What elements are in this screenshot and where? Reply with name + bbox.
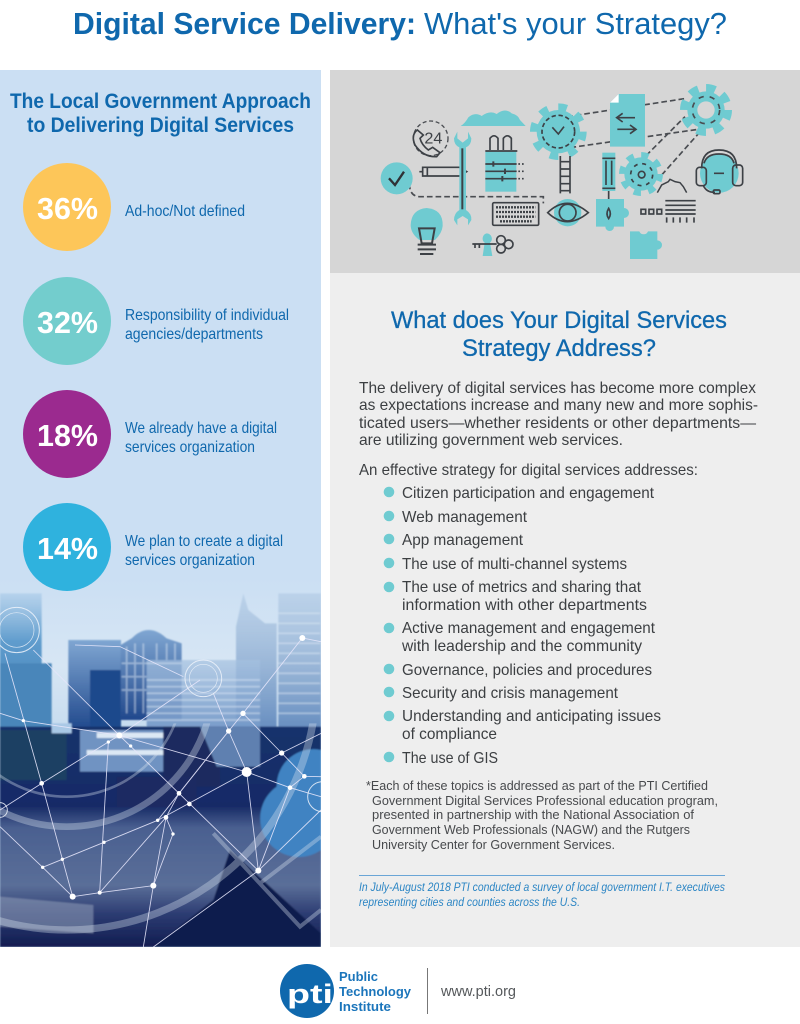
icon: large gear [684,88,728,132]
icon: screwdriver [602,153,615,208]
stat: 32%: 32% [37,305,98,340]
stat: 18%: services organization [125,439,255,456]
intro paragraph: ticated users—whether residents or other departments— [359,415,756,432]
panel heading [10,90,311,137]
section heading: What does Your Digital Services [391,307,727,334]
stat: 18% [23,390,277,478]
survey note: representing cities and counties across the U.S. [359,897,580,909]
stat: 36% [23,163,245,251]
icon: phone 24: 24 [424,130,443,147]
bullet list: Web management [402,509,528,526]
network lines [0,638,321,947]
icon: check [381,162,413,194]
panel: icon illustration [330,70,800,273]
survey note: In July-August 2018 PTI conducted a survey of local government I.T. executives [359,882,725,894]
stat: 32%: Responsibility of individual [125,307,289,324]
bullet list: The use of metrics and sharing that [402,579,642,596]
icon: small gear [622,155,660,193]
section heading [391,307,727,362]
footnote: *Each of these topics is addressed as part of the PTI Certified [366,779,708,793]
icon: key [472,233,513,256]
footer logo [280,964,516,1018]
icon: light bulb [411,208,443,254]
bullet list: Governance, policies and procedures [402,662,652,679]
icon: phone 24 [413,121,448,157]
stat: 14%: services organization [125,552,255,569]
footer logo: Public [339,969,378,984]
bullet list: Citizen participation and engagement [402,485,655,502]
footnote [366,779,718,852]
intro paragraph [359,380,758,479]
panel: local government approach [0,70,338,947]
bullet list: The use of multi-channel systems [402,556,627,573]
bullet list [384,485,661,767]
icon: headset [696,150,743,194]
footer logo: Technology [339,984,412,999]
intro paragraph: as expectations increase and many new and more sophis- [359,397,758,414]
panel: strategy text [330,273,800,947]
icon: ladder [560,156,570,193]
stat: 18%: 18% [37,418,98,453]
intro paragraph: are utilizing government web services. [359,432,623,449]
icon: dashed connectors [409,98,702,203]
bullet list: information with other departments [402,597,647,614]
stat: 36%: Ad-hoc/Not defined [125,203,245,220]
stat: 32% [23,277,289,365]
icon: outline gear and data lines [641,179,696,223]
city network image [0,593,321,947]
icon: pencil [419,167,467,176]
stat: 18%: We already have a digital [125,420,277,437]
section heading: Strategy Address? [462,335,656,362]
icon: wrench [454,132,471,225]
panel heading: The Local Government Approach [10,90,311,113]
bullet list: Active management and engagement [402,620,656,637]
icon: clock gear [534,107,583,156]
stat: 14%: We plan to create a digital [125,533,283,550]
bullet list: of compliance [402,726,497,743]
footnote: University Center for Government Services. [372,838,615,852]
icon: eye [548,199,588,226]
icon: keyboard [493,203,539,225]
survey note [359,882,725,909]
footnote: Government Web Professionals (NAGW) and the Rutgers [372,823,690,837]
bullet list: The use of GIS [402,750,498,767]
icon: sliders [485,136,525,192]
footer logo: pti [287,979,333,1009]
stat: 14% [23,503,283,591]
stat: 14%: 14% [37,531,98,566]
title: What's your Strategy? [424,6,727,41]
icon: cloud [461,110,526,126]
footnote: presented in partnership with the National Association of [372,808,695,822]
icon: puzzle and screwdriver tip [596,199,629,231]
intro paragraph: The delivery of digital services has become more complex [359,380,756,397]
stat: 32%: agencies/departments [125,326,263,343]
icon: puzzle piece [630,231,662,259]
intro paragraph: An effective strategy for digital services addresses: [359,462,698,479]
title [73,6,727,41]
bullet list: App management [402,532,524,549]
bullet list: with leadership and the community [401,638,642,655]
footnote: Government Digital Services Professional education program, [372,794,718,808]
footer logo: Institute [339,999,391,1014]
bullet list: Security and crisis management [402,685,619,702]
footer logo: www.pti.org [440,983,516,1000]
panel heading: to Delivering Digital Services [27,114,294,137]
title: Digital Service Delivery: [73,6,416,41]
icon: document arrows [610,94,645,147]
stat: 36%: 36% [37,191,98,226]
bullet list: Understanding and anticipating issues [402,708,661,725]
